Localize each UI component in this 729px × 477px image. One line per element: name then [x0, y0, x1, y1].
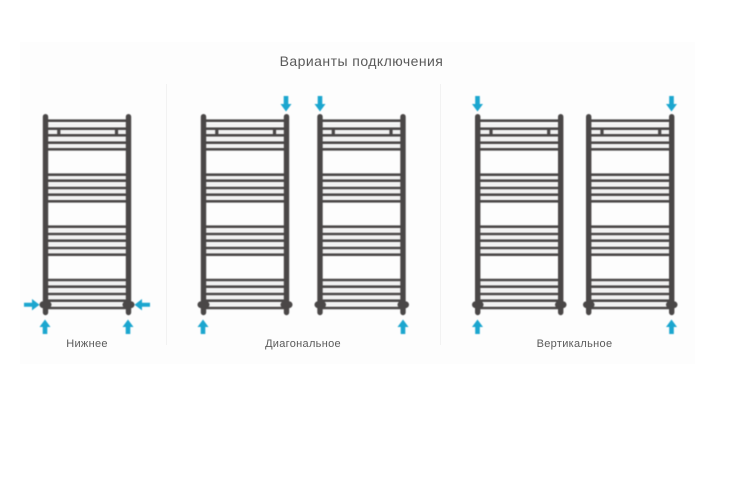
- arrow: top left: [472, 96, 483, 112]
- towel rail: [589, 117, 674, 312]
- arrow: bottom right: [122, 320, 134, 334]
- label: bottom connection: Нижнее: [66, 338, 108, 350]
- arrow: bottom left: [198, 320, 208, 334]
- connection nodes: [318, 301, 406, 308]
- title: Варианты подключения: [280, 53, 443, 69]
- label: vertical connection: Вертикальное: [537, 338, 612, 350]
- panel: vertical connection, first rail: [472, 96, 563, 334]
- arrow: bottom right: [398, 320, 408, 334]
- arrow: inlet right side: [134, 299, 150, 310]
- arrow: inlet left side: [24, 299, 40, 310]
- panel: diagonal connection, first rail: [198, 96, 292, 334]
- arrow: top right: [666, 96, 677, 112]
- arrow: top right: [280, 96, 292, 112]
- connection nodes: [586, 301, 674, 308]
- towel rail: [46, 117, 130, 312]
- towel rail: [320, 117, 405, 312]
- connection nodes: [43, 301, 131, 308]
- connection nodes: [201, 301, 289, 308]
- connection nodes: [476, 301, 563, 308]
- panel: diagonal connection, second rail: [314, 96, 408, 334]
- label: diagonal connection: Диагональное: [265, 338, 341, 350]
- arrow: bottom right: [666, 320, 677, 334]
- arrow: bottom left: [40, 320, 50, 334]
- panel: vertical connection, second rail: [586, 96, 677, 334]
- arrow: bottom left: [472, 320, 483, 334]
- towel rail: [204, 117, 288, 312]
- arrow: top left: [314, 96, 326, 112]
- towel rail: [478, 117, 563, 312]
- panel: bottom connection: [24, 117, 150, 334]
